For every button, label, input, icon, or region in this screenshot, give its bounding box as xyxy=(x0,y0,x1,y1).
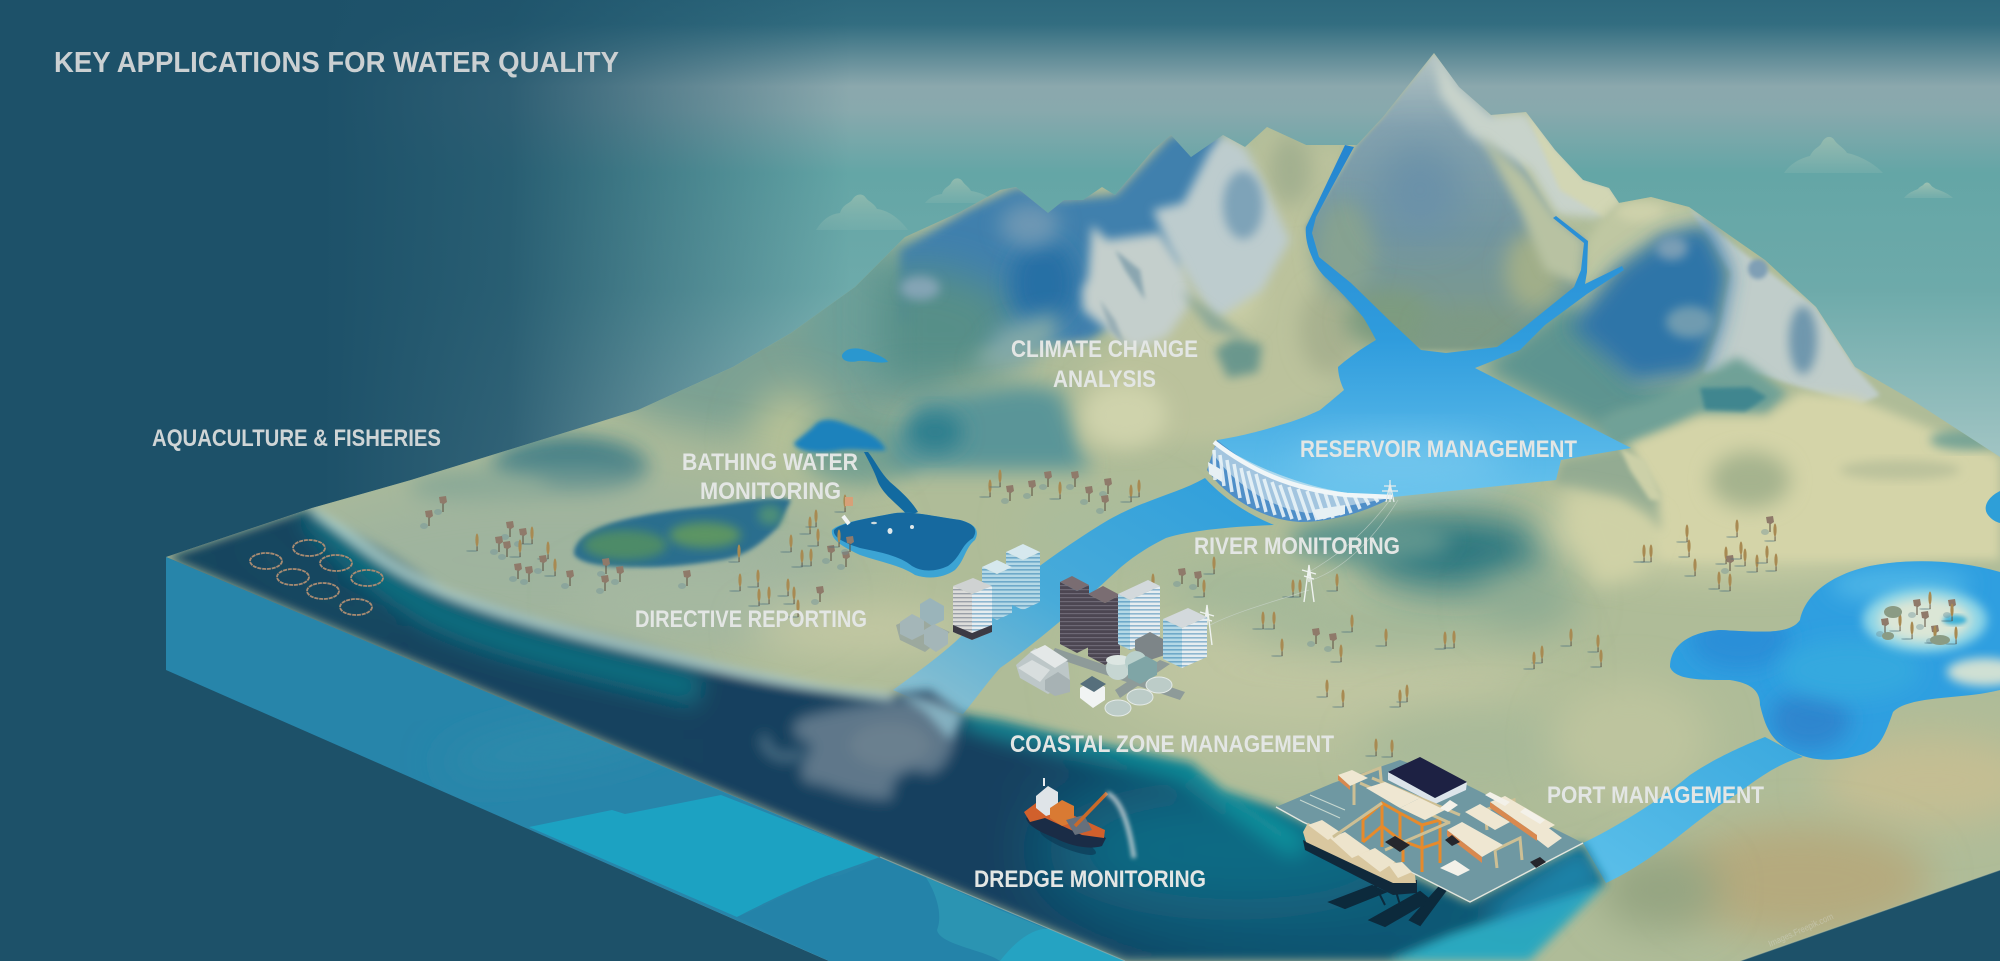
ridge below reservoir xyxy=(1561,490,1660,587)
central peak xyxy=(1306,53,1619,352)
port xyxy=(1276,757,1583,926)
trees: western lowlands xyxy=(420,470,1141,618)
dark ground left of and below block xyxy=(0,557,829,961)
land colour fields xyxy=(260,240,2000,935)
label: river monitoring: RIVER MONITORING xyxy=(1194,533,1400,560)
dam xyxy=(1207,440,1393,522)
stacked containers on the quay xyxy=(1338,770,1562,857)
island trees xyxy=(1876,592,1958,645)
warehouse xyxy=(1388,772,1467,804)
sliver of water at right edge xyxy=(1986,491,2000,523)
city cluster east with treatment plant xyxy=(1016,576,1207,716)
small mountain lake xyxy=(842,348,888,363)
label: climate change analysis: ANALYSIS xyxy=(1053,366,1156,393)
river from dam to sea xyxy=(893,478,1274,714)
label: reservoir management: RESERVOIR MANAGEMENT xyxy=(1300,436,1577,463)
left dark gradient fade xyxy=(0,0,850,961)
sea with coast xyxy=(160,500,1640,961)
dark ground at bottom right xyxy=(1740,870,2000,961)
label: bathing water monitoring xyxy=(682,449,858,505)
river to port xyxy=(1583,737,1803,883)
watermark: Images.Freepik.com xyxy=(1767,911,1835,949)
left mountain range xyxy=(880,127,1389,470)
label: climate change analysis: CLIMATE CHANGE xyxy=(1011,336,1198,363)
quay deck xyxy=(1276,760,1583,902)
label: bathing water monitoring: BATHING WATER xyxy=(682,449,858,476)
trees: eastern slopes xyxy=(1633,516,1778,592)
slab side face xyxy=(160,550,1130,961)
reservoir and mountain streams xyxy=(1217,145,1631,497)
bathing water lake xyxy=(832,513,977,577)
dredge spray xyxy=(1107,793,1134,858)
trees: central plain xyxy=(1142,556,1603,758)
crane shadows xyxy=(1330,884,1446,926)
ship hull xyxy=(1303,840,1417,895)
label: climate change analysis xyxy=(1011,336,1198,393)
clouds xyxy=(816,137,1953,230)
right peaks and slopes xyxy=(1480,197,2000,560)
sediment plume xyxy=(764,695,957,800)
label: directive reporting: DIRECTIVE REPORTING xyxy=(635,606,867,633)
label: dredge monitoring: DREDGE MONITORING xyxy=(974,866,1206,893)
city cluster west xyxy=(896,544,1040,652)
lake with algal bloom xyxy=(574,499,791,567)
crane and gantry frames xyxy=(1363,803,1440,872)
label: aquaculture and fisheries: AQUACULTURE & FISHERIES xyxy=(152,425,441,452)
power lines and pylons xyxy=(1200,500,1398,645)
aquaculture cages xyxy=(250,540,383,615)
label: port management: PORT MANAGEMENT xyxy=(1547,782,1764,809)
ship containers xyxy=(1308,820,1412,878)
upper bathing lake and stream xyxy=(794,420,918,516)
river mouth fan xyxy=(893,690,963,740)
title: KEY APPLICATIONS FOR WATER QUALITY xyxy=(54,47,619,79)
right lake with islands xyxy=(1660,491,2000,770)
electricity pylon at dam xyxy=(1382,480,1398,502)
label: bathing water monitoring: MONITORING xyxy=(700,478,841,505)
slab top edge highlight xyxy=(880,857,1125,961)
label: coastal zone management: COASTAL ZONE MANAGEMENT xyxy=(1010,731,1334,758)
dredger ship xyxy=(1024,778,1134,860)
